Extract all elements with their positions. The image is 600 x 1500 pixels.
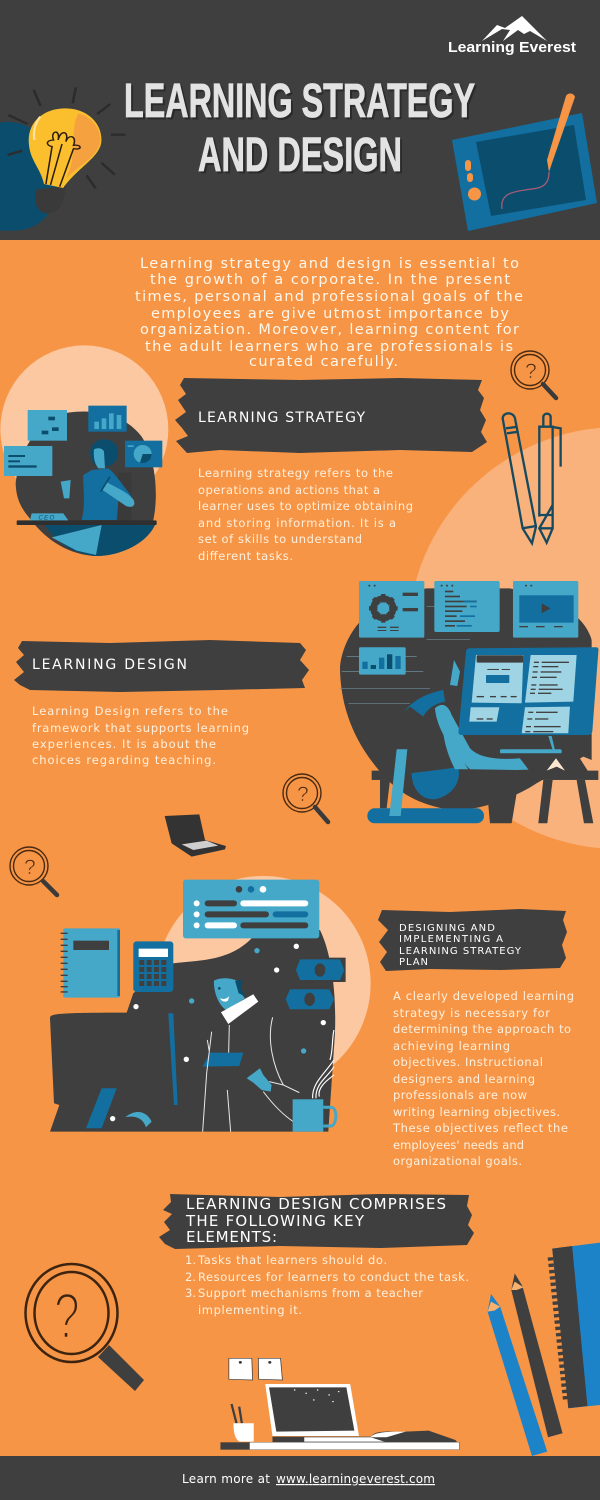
intro text: times, personal and professional goals of the bbox=[135, 289, 523, 305]
banner: learning design bbox=[14, 640, 309, 692]
text: designing and implementing: determining the approach to bbox=[393, 1022, 571, 1036]
icon: large magnifier bbox=[26, 1264, 144, 1391]
logo: Learning Everest: Learning Everest bbox=[448, 39, 576, 56]
list: key elements: Support mechanisms from a teacher bbox=[198, 1286, 423, 1300]
banner: designing and implementing: PLAN bbox=[399, 957, 428, 968]
icon: magnifier top right: ? bbox=[525, 360, 537, 383]
banner: key elements: LEARNING DESIGN COMPRISES bbox=[186, 1195, 446, 1213]
text: learning design: Learning Design refers to the bbox=[32, 704, 228, 718]
text: learning design: choices regarding teaching. bbox=[32, 753, 216, 767]
text: designing and implementing: achieving learning bbox=[393, 1039, 510, 1053]
text: designing and implementing: professionals are now bbox=[393, 1088, 527, 1102]
illustration: person at computer bbox=[340, 581, 598, 823]
icon: magnifier middle bbox=[283, 774, 328, 822]
text: learning strategy: and storing information. It is a bbox=[198, 516, 396, 530]
text: learning strategy bbox=[198, 466, 413, 563]
intro text: organization. Moreover, learning content for bbox=[140, 322, 519, 338]
text: learning design: framework that supports learning bbox=[32, 721, 249, 735]
list: key elements: implementing it. bbox=[198, 1303, 302, 1317]
illustration: woman at desk: CEO bbox=[38, 514, 54, 521]
illustration: woman at desk bbox=[0, 345, 168, 556]
title: AND DESIGN bbox=[198, 129, 402, 182]
text: learning strategy: set of skills to understand bbox=[198, 532, 362, 546]
banner: designing and implementing: LEARNING STRATEGY bbox=[399, 946, 522, 957]
list: key elements: 3. bbox=[185, 1286, 196, 1300]
list: key elements: Tasks that learners should do. bbox=[197, 1253, 387, 1267]
text: designing and implementing: designers and learning bbox=[393, 1072, 535, 1086]
icon: magnifier top right bbox=[511, 351, 556, 398]
text: designing and implementing: writing learning objectives. bbox=[393, 1105, 560, 1119]
footer band: www.learningeverest.com bbox=[276, 1472, 435, 1486]
banner: learning design: LEARNING DESIGN bbox=[32, 657, 187, 673]
icon: large magnifier: ? bbox=[54, 1281, 80, 1352]
intro text: employees are give utmost importance by bbox=[151, 306, 509, 322]
icon: pencil and pen outline bbox=[503, 413, 561, 543]
list: key elements bbox=[185, 1253, 469, 1317]
intro text bbox=[135, 256, 523, 370]
intro text: Learning strategy and design is essential to bbox=[140, 256, 519, 272]
footer band: Learn more at bbox=[182, 1472, 270, 1486]
text: learning strategy: different tasks. bbox=[198, 549, 293, 563]
title: AND DESIGN bbox=[200, 131, 404, 184]
banner: learning strategy: LEARNING STRATEGY bbox=[198, 410, 365, 426]
footer band bbox=[0, 1456, 600, 1500]
icon: magnifier left: ? bbox=[24, 856, 36, 879]
text: designing and implementing bbox=[392, 989, 574, 1168]
banner: key elements bbox=[159, 1194, 474, 1249]
large pale circle right bbox=[408, 427, 600, 849]
header band bbox=[0, 0, 600, 240]
illustration: man with dashboard bbox=[50, 876, 371, 1132]
logo: Learning Everest bbox=[448, 16, 576, 56]
intro text: the growth of a corporate. In the present bbox=[150, 272, 510, 288]
banner: designing and implementing: IMPLEMENTING A bbox=[399, 934, 503, 945]
icon: light bulb bbox=[0, 87, 126, 231]
list: key elements: 1. bbox=[185, 1253, 196, 1267]
banner: key elements: ELEMENTS: bbox=[186, 1228, 277, 1246]
icon: magnifier middle: ? bbox=[297, 783, 309, 806]
icon: drawing tablet bbox=[452, 93, 597, 231]
text: designing and implementing: strategy is necessary for bbox=[393, 1006, 550, 1020]
text: learning design bbox=[32, 704, 249, 767]
text: designing and implementing: objectives. Instructional bbox=[393, 1055, 543, 1069]
text: designing and implementing: A clearly developed learning bbox=[393, 989, 574, 1003]
banner: designing and implementing bbox=[378, 909, 567, 971]
icon: small laptop bbox=[165, 814, 226, 857]
text: learning strategy: learner uses to optimize obtaining bbox=[198, 499, 413, 513]
banner: key elements: THE FOLLOWING KEY bbox=[185, 1212, 365, 1230]
text: learning strategy: Learning strategy refers to the bbox=[198, 466, 393, 480]
list: key elements: Resources for learners to conduct the task. bbox=[198, 1270, 469, 1284]
illustration: pencils and notebook bbox=[488, 1243, 600, 1456]
title bbox=[124, 75, 477, 184]
intro text: the adult learners who are professionals is bbox=[145, 339, 513, 355]
text: designing and implementing: These objectives reflect the bbox=[392, 1121, 568, 1135]
text: designing and implementing: organizational goals. bbox=[393, 1154, 522, 1168]
intro text: curated carefully. bbox=[249, 354, 398, 370]
illustration: laptop on desk bbox=[220, 1358, 459, 1450]
banner: learning strategy bbox=[175, 378, 487, 453]
banner: designing and implementing: DESIGNING AND bbox=[399, 923, 495, 934]
text: designing and implementing: employees' needs and bbox=[393, 1138, 524, 1152]
icon: magnifier left bbox=[10, 847, 57, 895]
text: learning strategy: operations and actions that a bbox=[198, 483, 380, 497]
list: key elements: 2. bbox=[185, 1270, 196, 1284]
text: learning design: experiences. It is about the bbox=[32, 737, 216, 751]
